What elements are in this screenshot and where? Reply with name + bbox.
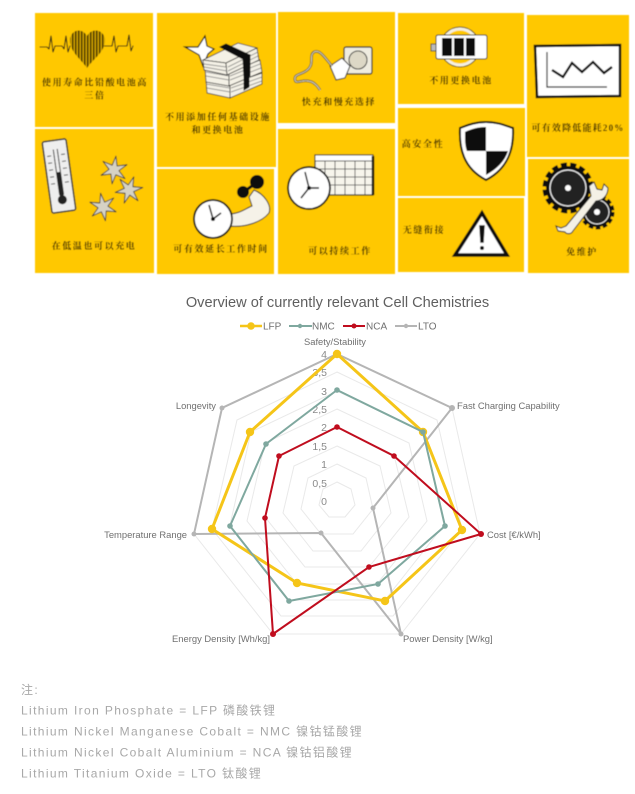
- icon: battery with arrow: [431, 27, 487, 67]
- value axis labels: 1,5: [312, 441, 327, 453]
- caption: no infrastructure: 不用添加任何基础设施: [165, 111, 271, 122]
- icon: gears and wrench: [545, 165, 612, 234]
- caption: lifespan: 三倍: [84, 90, 106, 100]
- panel: no battery replacement: [398, 13, 524, 104]
- axis category labels: [104, 336, 560, 644]
- panel: seamless connection: [398, 198, 524, 272]
- value axis labels: 2: [321, 422, 327, 434]
- icon: snowflakes: [89, 154, 145, 223]
- panel: safety: [398, 108, 525, 196]
- legend: LTO: [418, 322, 437, 332]
- caption: extended working time: 可有效延长工作时间: [173, 243, 269, 254]
- caption: no infrastructure: 和更换电池: [191, 124, 245, 135]
- icon: shield: [460, 122, 513, 180]
- icon: starburst: [185, 36, 214, 66]
- legend: [240, 322, 437, 332]
- axis category labels: Fast Charging Capability: [457, 400, 560, 411]
- icon: muscle arm and dumbbell: [228, 175, 270, 226]
- series: NMC: [227, 387, 448, 604]
- icon: warning triangle: [455, 213, 507, 255]
- panel: continuous work: [278, 129, 395, 274]
- axis category labels: Safety/Stability: [304, 336, 366, 347]
- axis category labels: Temperature Range: [104, 529, 187, 540]
- panel: maintenance free: [528, 159, 629, 273]
- caption: seamless connection: 无缝衔接: [403, 224, 445, 235]
- icon: plug and socket: [295, 47, 372, 90]
- footnote: Lithium Nickel Manganese Cobalt = NMC 镍钴锰酸锂: [21, 724, 363, 738]
- panel: lower energy consumption: [527, 15, 629, 157]
- value axis labels: 3: [321, 386, 327, 398]
- icon: thermometer: [42, 139, 76, 213]
- footnote: [21, 682, 363, 780]
- radar chart: [104, 336, 560, 644]
- value axis labels: 1: [321, 459, 327, 471]
- value axis labels: 4: [321, 349, 327, 361]
- caption: lifespan: 使用寿命比铅酸电池高: [42, 76, 148, 88]
- icon: heartbeat heart: [40, 30, 133, 68]
- series: NCA: [262, 424, 484, 637]
- icon: stack of banknotes: [203, 43, 262, 98]
- icon: clock: [288, 167, 330, 209]
- value axis labels: 0,5: [312, 478, 327, 490]
- axis category labels: Longevity: [176, 400, 216, 411]
- value axis labels: [312, 349, 327, 508]
- legend: NCA: [366, 322, 387, 332]
- feature panel grid: [35, 12, 629, 274]
- footnote: Lithium Nickel Cobalt Aluminium = NCA 镍钴铝酸锂: [21, 744, 353, 760]
- chart title: Overview of currently relevant Cell Chemistries: [186, 295, 489, 311]
- caption: lower energy consumption: 可有效降低能耗20%: [531, 122, 625, 133]
- footnote: Lithium Iron Phosphate = LFP 磷酸铁锂: [21, 702, 276, 718]
- legend: NMC: [312, 322, 335, 332]
- panel: extended working time: [157, 169, 274, 274]
- icon: calendar: [315, 155, 373, 195]
- axis category labels: Energy Density [Wh/kg]: [172, 633, 270, 644]
- caption: maintenance free: 免维护: [566, 246, 598, 257]
- axis category labels: Power Density [W/kg]: [403, 633, 493, 644]
- icon: clock: [194, 200, 232, 238]
- caption: charging choice: 快充和慢充选择: [302, 96, 376, 107]
- axis category labels: Cost [€/kWh]: [487, 529, 541, 540]
- series: LTO: [192, 351, 455, 636]
- value axis labels: 3,5: [312, 367, 327, 379]
- footnote: 注:: [21, 682, 39, 697]
- icon: line chart: [535, 45, 620, 97]
- legend: LFP: [263, 322, 282, 332]
- value axis labels: 2,5: [312, 404, 327, 416]
- panel: no infrastructure: [157, 13, 276, 167]
- caption: continuous work: 可以持续工作: [308, 245, 372, 256]
- panel: charging choice: [278, 12, 395, 123]
- caption: no battery replacement: 不用更换电池: [429, 74, 493, 86]
- series: LFP: [208, 350, 466, 605]
- panel: low temperature: [35, 129, 154, 273]
- caption: safety: 高安全性: [402, 138, 444, 149]
- caption: low temperature: 在低温也可以充电: [52, 240, 136, 251]
- panel: lifespan: [35, 13, 153, 127]
- footnote: Lithium Titanium Oxide = LTO 钛酸锂: [21, 766, 262, 780]
- value axis labels: 0: [321, 496, 327, 508]
